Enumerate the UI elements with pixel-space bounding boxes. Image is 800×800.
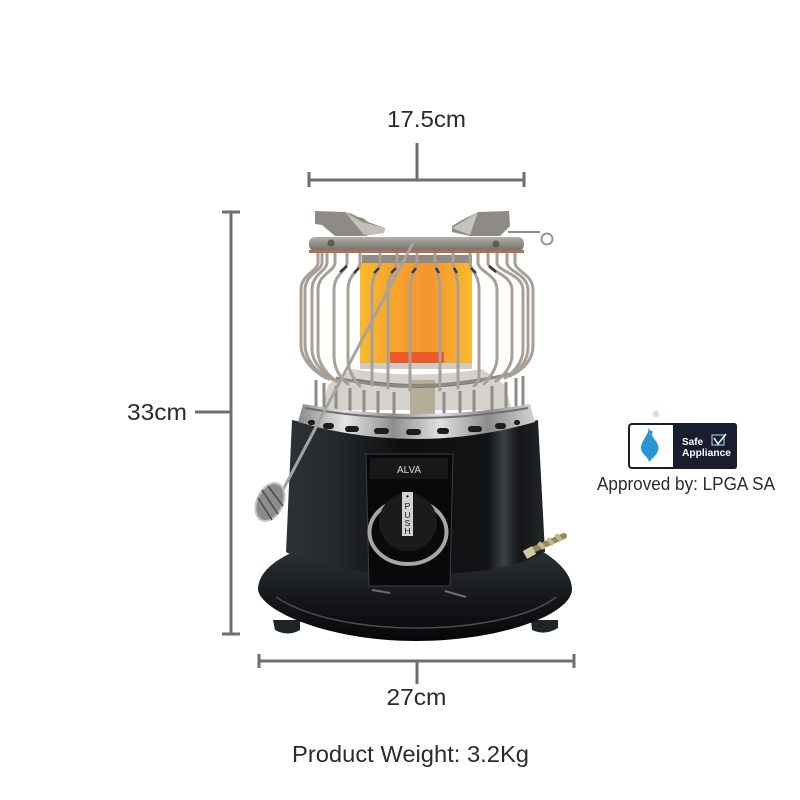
handle rod	[276, 243, 413, 503]
brand label: ALVA	[397, 465, 421, 476]
arrow: top width bracket	[309, 143, 524, 187]
icon: blue flame	[641, 424, 658, 462]
wire cage bars	[301, 253, 533, 390]
dimension: height 33cm	[127, 212, 240, 634]
label: 33cm: 33cm	[127, 399, 187, 425]
push label: P	[405, 501, 411, 511]
brass gas inlet	[525, 536, 564, 555]
dimension: top width 17.5cm	[309, 106, 524, 187]
registered mark: ®	[653, 410, 659, 419]
label: 17.5cm: 17.5cm	[387, 106, 466, 132]
push label: U	[404, 510, 411, 520]
badge text: Safe: Safe	[682, 437, 704, 448]
badge text: Appliance: Appliance	[682, 448, 731, 459]
arrow: base width bracket	[259, 654, 574, 684]
heater product illustration	[250, 211, 572, 641]
product weight: Product Weight: 3.2Kg	[292, 741, 529, 767]
label: 27cm: 27cm	[386, 684, 446, 710]
perforated chrome collar	[298, 404, 535, 439]
approval caption: Approved by: LPGA SA	[597, 474, 775, 494]
coiled handle grip	[250, 478, 290, 526]
black body	[286, 420, 545, 574]
icon: checkbox	[712, 434, 726, 445]
base skirt	[258, 553, 572, 641]
cage bend shadows	[340, 266, 496, 273]
dimension: base width 27cm	[259, 654, 574, 710]
push label: S	[405, 518, 411, 528]
safety certification badge	[629, 410, 737, 469]
control panel	[366, 454, 453, 586]
push label: H	[404, 526, 411, 536]
control knob	[370, 491, 446, 564]
top ring with pot supports	[309, 211, 552, 253]
inner burner and lower cage	[316, 369, 523, 416]
badge panel	[629, 423, 737, 469]
glowing ceramic mesh	[360, 255, 472, 369]
push label: •	[406, 491, 409, 501]
arrow: height bracket	[195, 212, 240, 634]
rubber feet	[273, 620, 558, 634]
